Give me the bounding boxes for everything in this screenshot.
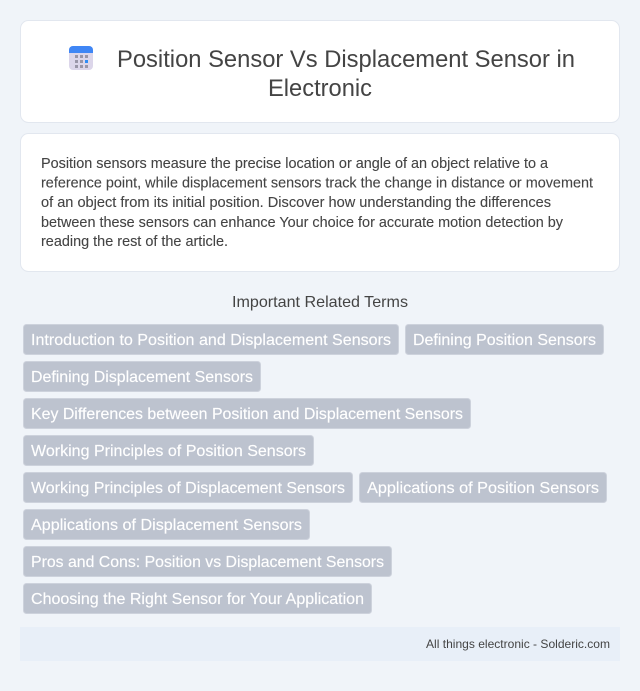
panel: intro text: reference point, while displacement sensors track the change in distance or movement — [41, 176, 593, 192]
tag: Pros and Cons: Position vs Displacement Sensors — [31, 554, 384, 571]
tag: Applications of Displacement Sensors — [31, 517, 302, 534]
tag — [24, 324, 398, 354]
tag — [24, 584, 372, 614]
title — [117, 46, 575, 102]
tag — [24, 472, 352, 502]
tag: Working Principles of Position Sensors — [31, 443, 306, 460]
tag — [360, 472, 606, 502]
panel: title header — [20, 20, 620, 122]
footer — [20, 627, 620, 661]
tag — [24, 546, 392, 576]
panel: intro text: reading the rest of the article. — [41, 234, 228, 250]
tag: Working Principles of Displacement Sensors — [31, 480, 345, 497]
tag — [24, 510, 310, 540]
footer: All things electronic - Solderic.com — [426, 637, 610, 651]
panel: intro text: of an object from its initial position. Discover how understanding the differences — [41, 195, 551, 211]
tag: Introduction to Position and Displacement Sensors — [31, 332, 391, 349]
tag — [24, 398, 470, 428]
tag: Defining Position Sensors — [413, 332, 596, 349]
panel: intro text — [20, 134, 620, 272]
tag list — [24, 324, 606, 614]
icon: calendar — [69, 46, 93, 70]
tag: Applications of Position Sensors — [367, 480, 599, 497]
heading: important related terms: Important Related Terms — [232, 294, 408, 311]
tag — [24, 362, 260, 392]
tag — [24, 436, 314, 466]
tag — [406, 324, 604, 354]
title: Electronic — [268, 75, 372, 102]
title: Position Sensor Vs Displacement Sensor in — [117, 46, 575, 73]
tag: Choosing the Right Sensor for Your Application — [31, 591, 364, 608]
panel: intro text: Position sensors measure the precise location or angle of an object relative to a — [41, 156, 548, 172]
tag: Defining Displacement Sensors — [31, 369, 253, 386]
tag: Key Differences between Position and Displacement Sensors — [31, 406, 463, 423]
panel: intro text: between these sensors can enhance Your choice for accurate motion detection by — [41, 215, 564, 231]
